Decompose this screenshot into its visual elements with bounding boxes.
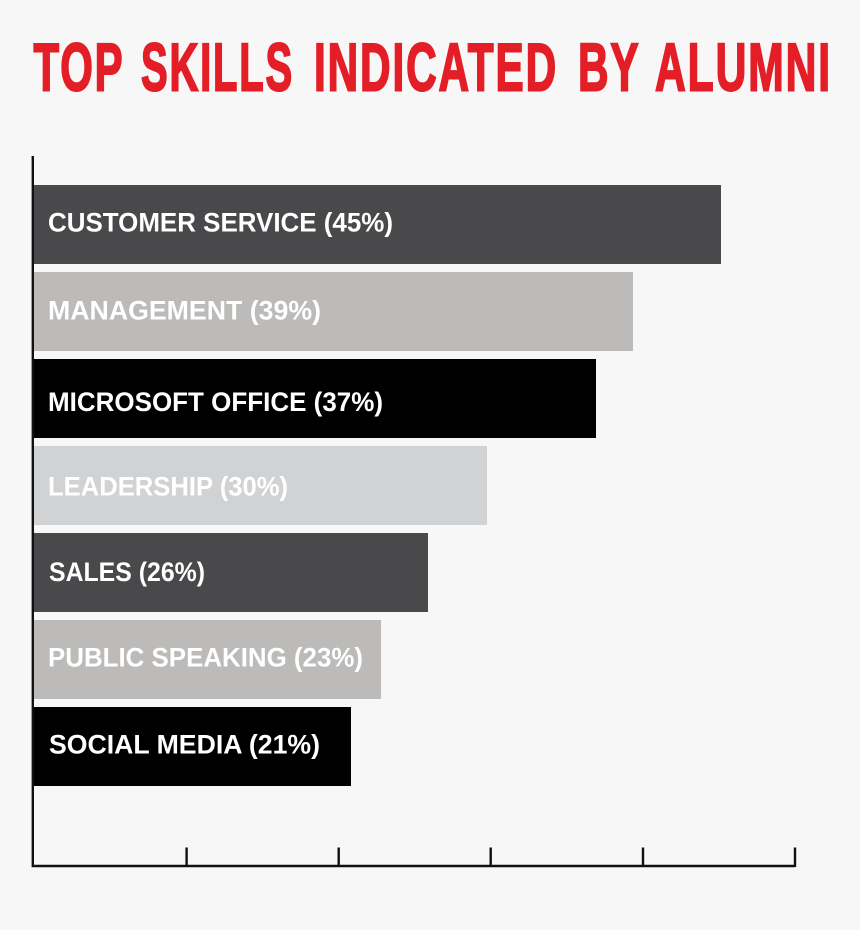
chart axes (33, 156, 795, 867)
bar: sales: SALES (26%) (49, 557, 205, 587)
bar: public speaking (34, 620, 381, 699)
bar: sales (34, 533, 428, 612)
bar: microsoft office (34, 359, 596, 438)
title (34, 31, 832, 106)
bar: microsoft office: MICROSOFT OFFICE (37%) (48, 387, 383, 417)
bar: customer service: CUSTOMER SERVICE (45%) (48, 208, 393, 238)
bar: public speaking: PUBLIC SPEAKING (23%) (48, 643, 363, 673)
title: SKILLS (141, 31, 294, 106)
title: BY (578, 31, 640, 106)
bar: management: MANAGEMENT (39%) (48, 295, 321, 325)
bar: leadership (34, 446, 487, 525)
bar: social media: SOCIAL MEDIA (21%) (49, 730, 320, 760)
bar chart (34, 185, 721, 786)
bar: social media (34, 707, 351, 786)
title: TOP (34, 31, 124, 106)
bar: leadership: LEADERSHIP (30%) (48, 472, 288, 502)
bar: management (34, 272, 633, 351)
bar: customer service (34, 185, 721, 264)
title: INDICATED (314, 31, 558, 106)
